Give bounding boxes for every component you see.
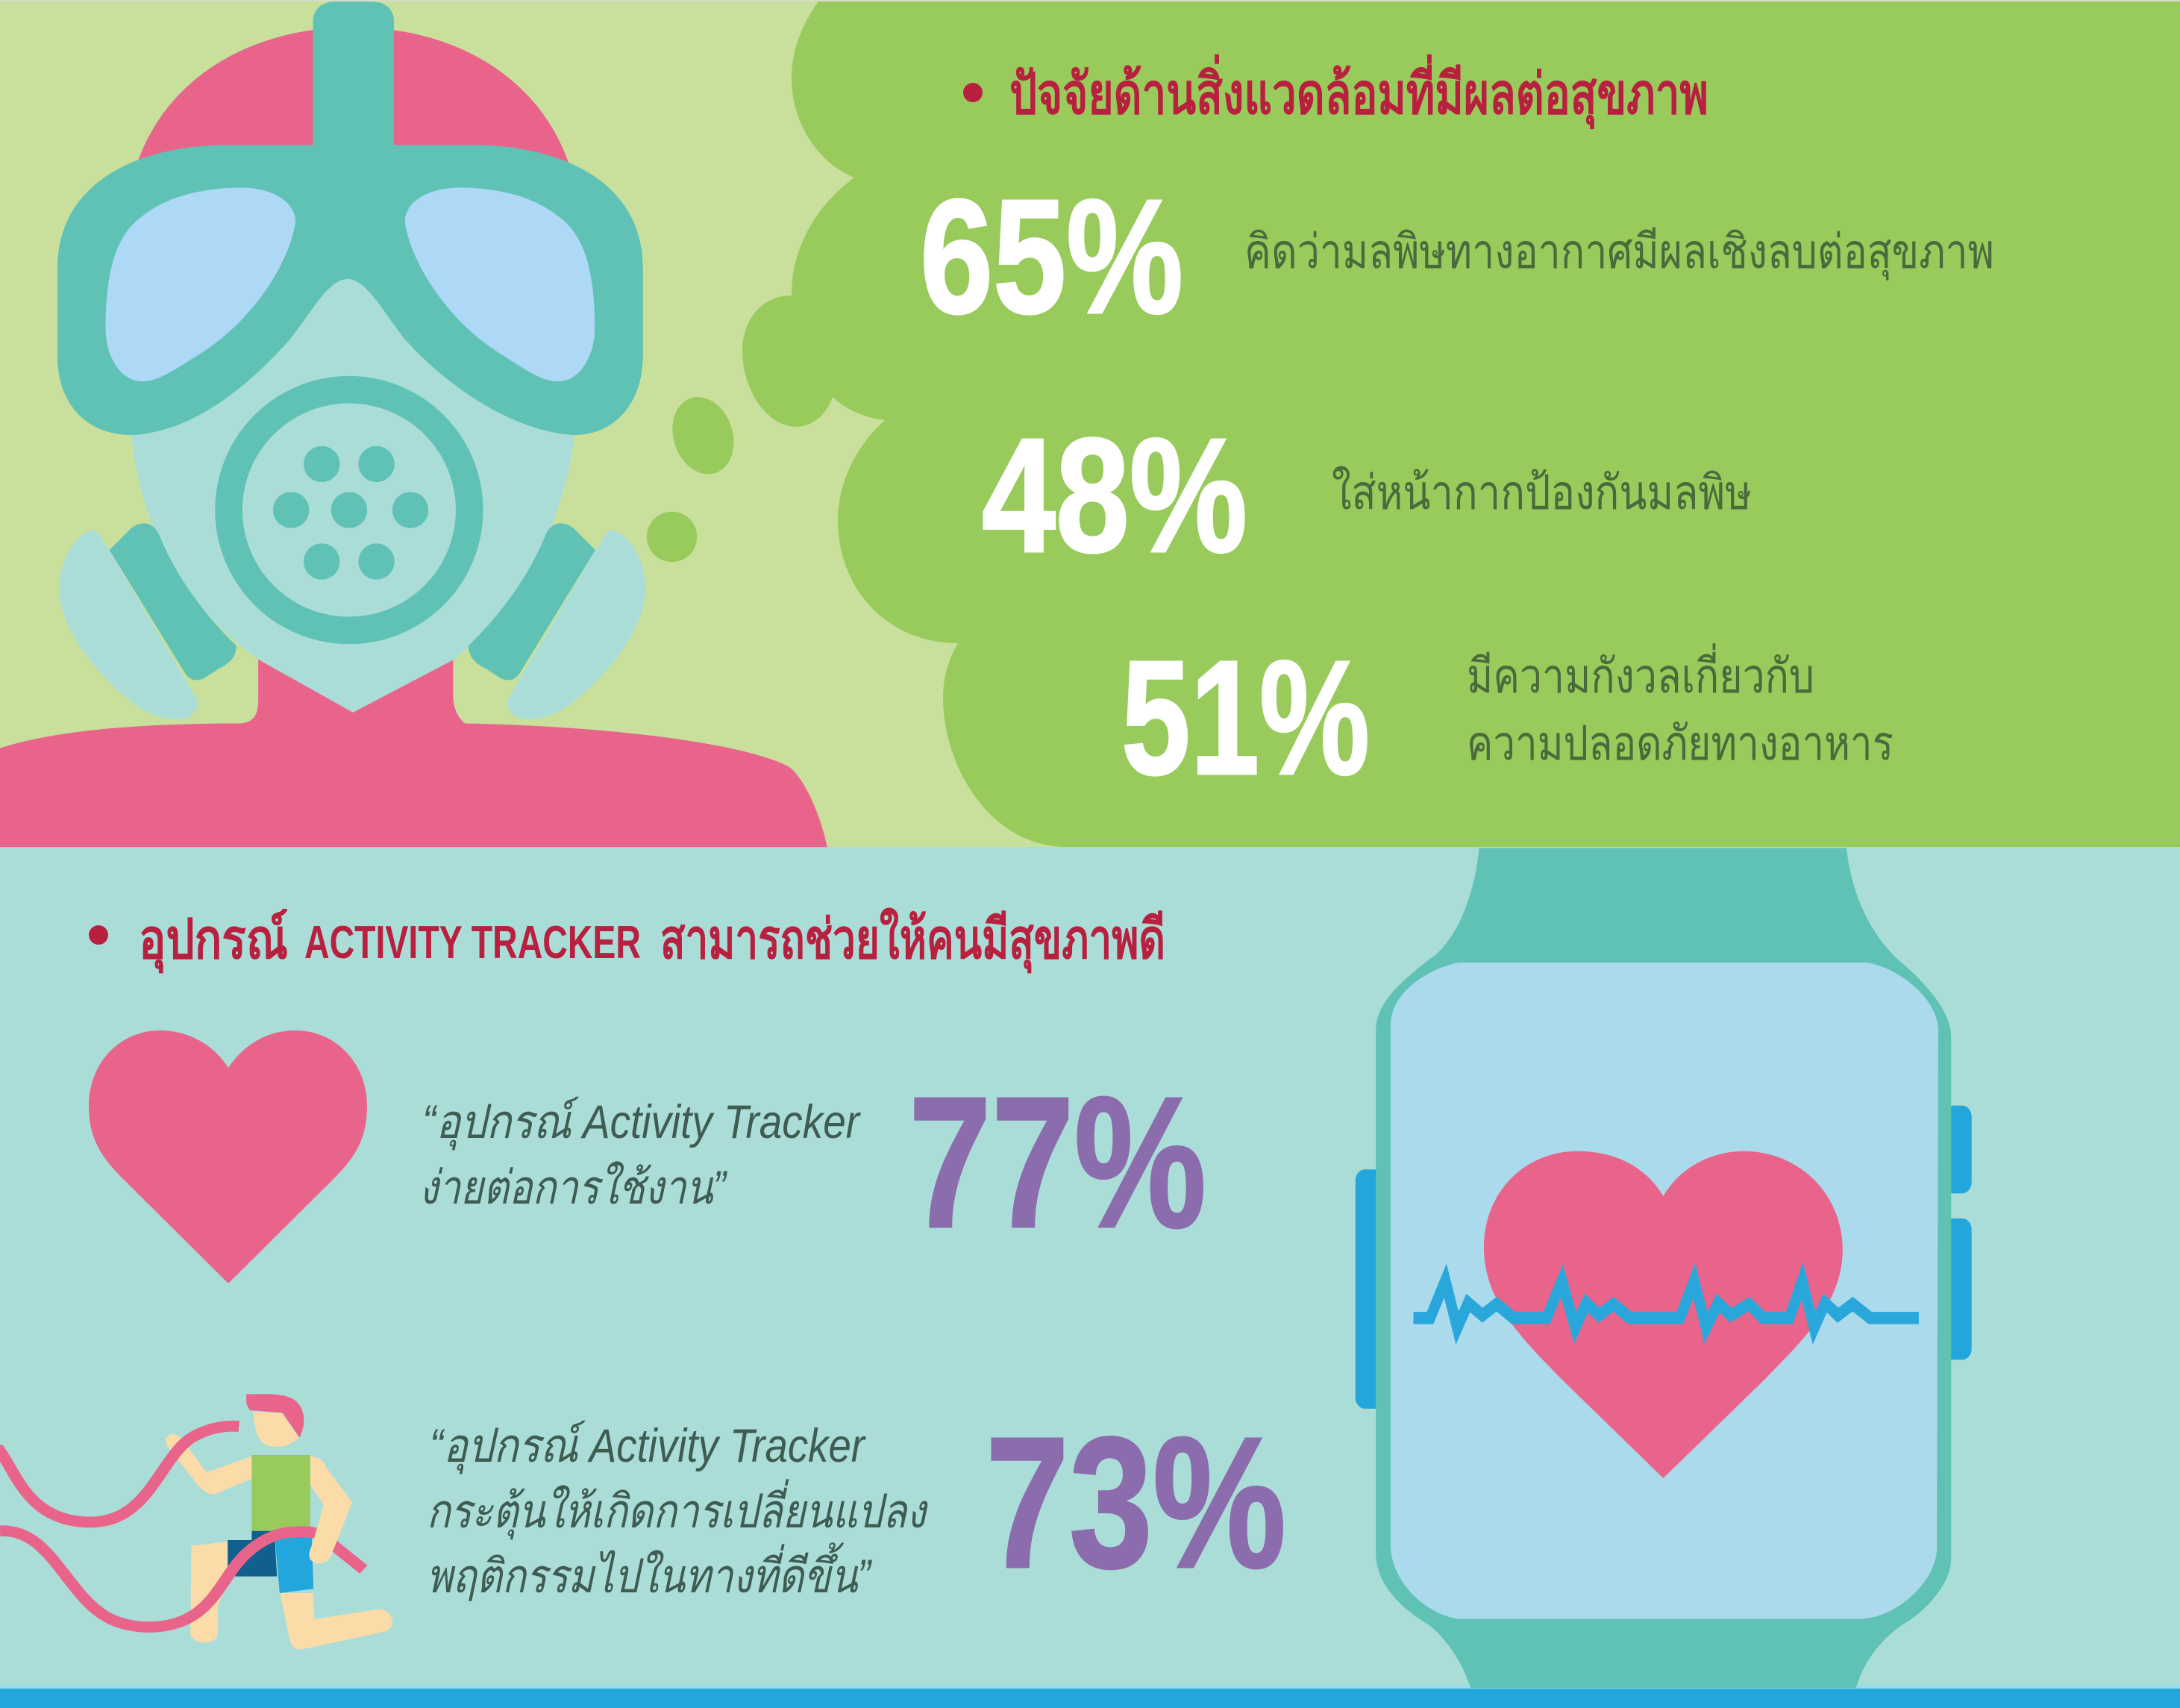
quote: easy to use: ง่ายต่อการใช้งาน” [419, 1161, 728, 1214]
stat: 51% food safety: ความปลอดภัยทางอาหาร [1467, 716, 1894, 770]
tank top [251, 1455, 310, 1531]
stat: 51% food safety: มีความกังวลเกี่ยวกับ [1467, 643, 1814, 703]
footer bar [0, 1684, 2180, 1708]
smoke puffs [647, 389, 743, 562]
left strap [110, 523, 237, 680]
right lower button [1944, 1219, 1972, 1360]
top edge line [0, 0, 2180, 1]
icon: pink heart [89, 1030, 367, 1283]
stat: 51% food safety [1121, 628, 1894, 809]
left side button [1356, 1169, 1384, 1409]
stat: 65% air pollution [920, 166, 1994, 348]
right upper button [1944, 1106, 1972, 1193]
heading: activity tracker: อุปกรณ์ [139, 908, 288, 974]
left arm [165, 1434, 251, 1495]
quote: encourages behaviour change: “อุปกรณ์ Activity Tracker [430, 1420, 867, 1474]
quote: easy to use: “อุปกรณ์ Activity Tracker [422, 1096, 862, 1151]
watch screen [1391, 963, 1938, 1619]
body and neck [0, 660, 827, 847]
heading: activity tracker: ACTIVITY TRACKER [304, 917, 641, 969]
face piece [131, 219, 574, 713]
panel: tracker background [0, 847, 2180, 1684]
heading: environmental factors [963, 54, 1708, 130]
pollution cloud [742, 0, 2180, 847]
right arm [309, 1457, 352, 1563]
screen heart [1484, 1151, 1843, 1478]
lower rope [0, 1531, 363, 1627]
goggle frame [57, 145, 643, 435]
stat: 48% wear masks [982, 405, 1752, 586]
quote: encourages behaviour change: พฤติกรรมไปในทางที่ดีขึ้น” [427, 1542, 873, 1603]
right strap [469, 523, 595, 680]
stat: 73%: 73% [986, 1398, 1286, 1607]
hood [137, 28, 569, 164]
respirator filter [229, 390, 469, 631]
quote: encourages behaviour change [427, 1420, 929, 1603]
heading: activity tracker: สามารถช่วยให้คนมีสุขภาพดี [660, 907, 1165, 974]
heading: environmental factors: ปัจจัยด้านสิ่งแวดล้อมที่มีผลต่อสุขภาพ [1009, 54, 1708, 130]
quote: easy to use [419, 1096, 862, 1214]
watch case and strap [1376, 848, 1951, 1688]
right filter cup [507, 530, 645, 719]
stat: 48% wear masks: ใส่หน้ากากป้องกันมลพิษ [1332, 466, 1752, 519]
left lens [106, 188, 295, 381]
stat: 48% wear masks: 48% [982, 405, 1247, 586]
left filter cup [59, 530, 198, 719]
head and hair [246, 1394, 304, 1447]
stat: 51% food safety: 51% [1121, 628, 1370, 809]
stat: 65% air pollution: 65% [920, 166, 1183, 348]
illustration: runner with battle ropes [0, 1394, 392, 1650]
snorkel [313, 1, 394, 153]
stat: 65% air pollution: คิดว่ามลพิษทางอากาศมีผลเชิงลบต่อสุขภาพ [1244, 225, 1994, 281]
quote: encourages behaviour change: กระตุ้นให้เกิดการเปลี่ยนแปลง [427, 1479, 929, 1540]
illustration: smartwatch [1356, 848, 1972, 1688]
heartbeat line [1414, 1280, 1919, 1328]
upper rope [0, 1426, 239, 1522]
shorts [228, 1531, 313, 1593]
back leg [190, 1542, 228, 1642]
right lens [405, 188, 595, 381]
illustration: gas mask person [0, 1, 827, 847]
heading: activity tracker [89, 907, 1165, 974]
stat: 77%: 77% [909, 1058, 1206, 1266]
panel: environment background [0, 0, 2180, 847]
front leg [281, 1593, 392, 1650]
